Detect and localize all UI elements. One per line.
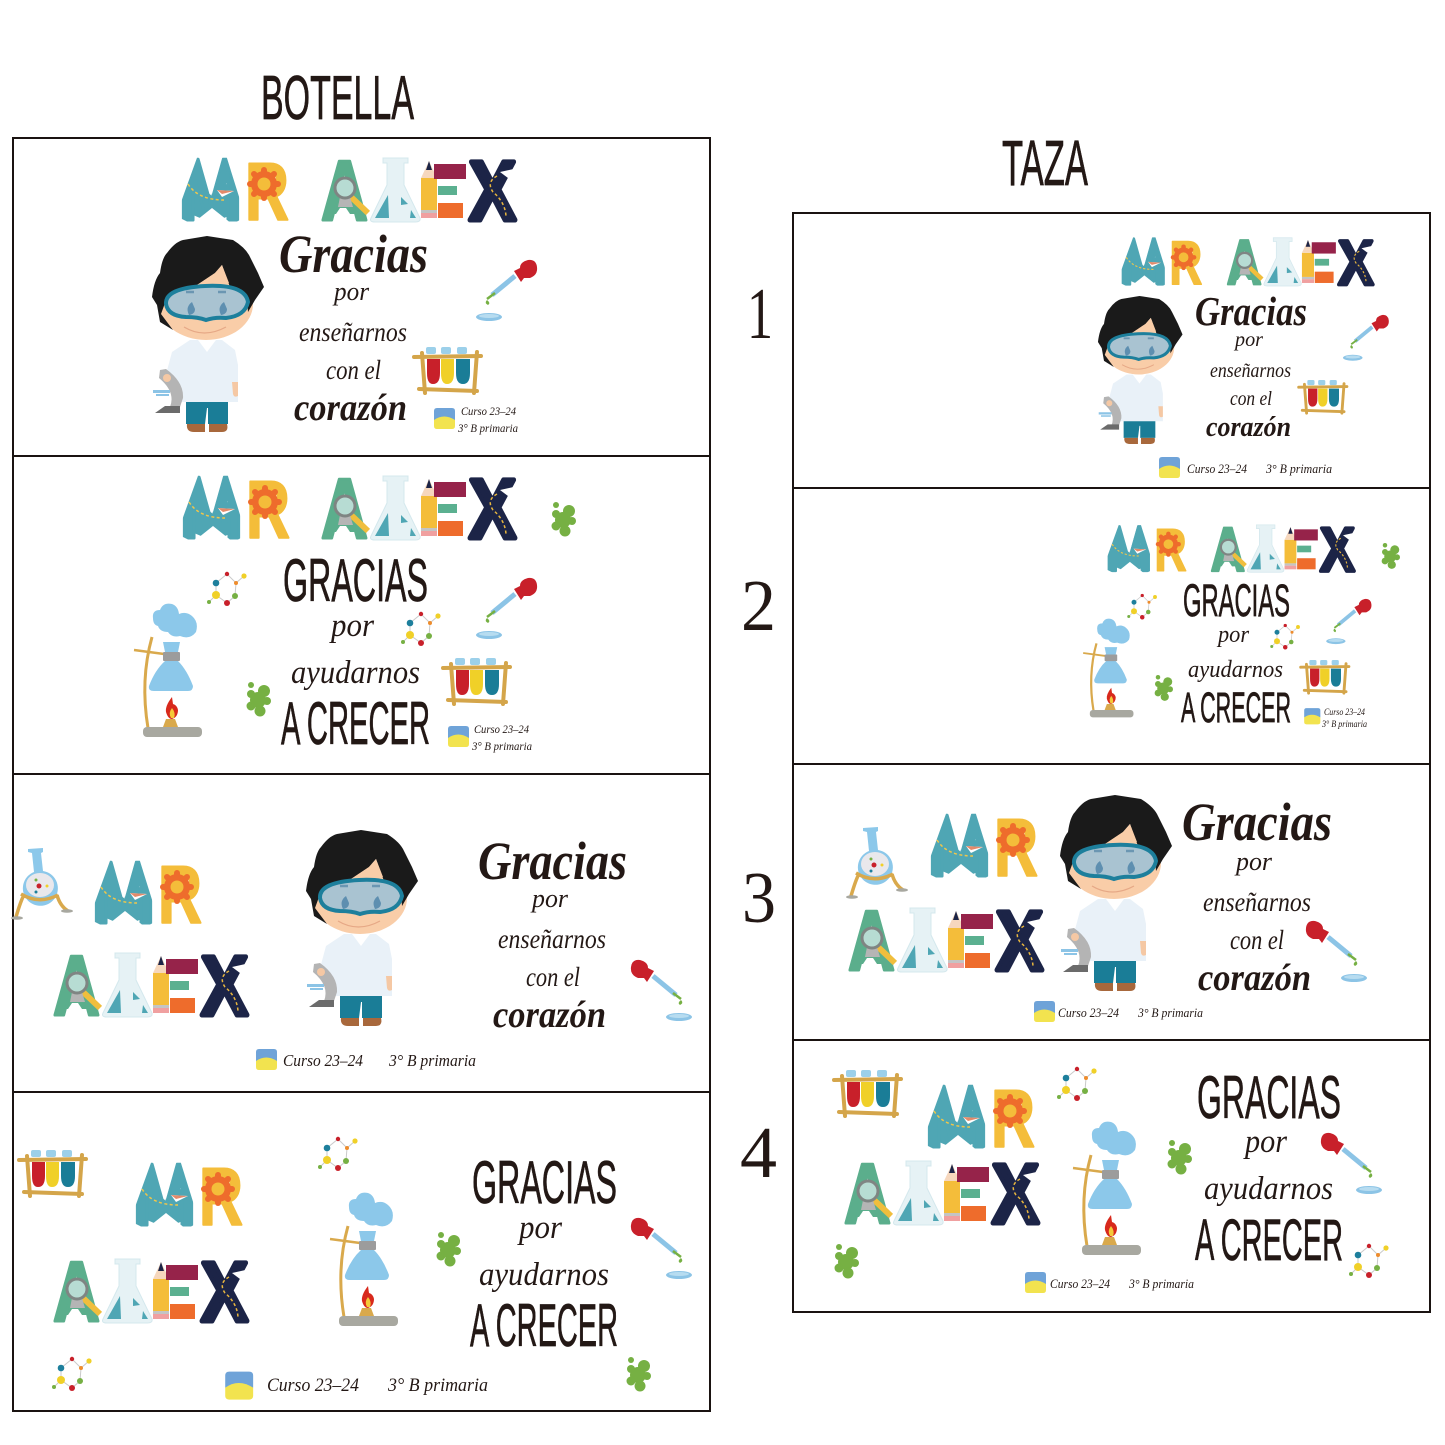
icon: class badge (448, 726, 469, 747)
course text: Curso 23–24 (1187, 461, 1247, 476)
icon: molecule (318, 1137, 358, 1171)
course text (1058, 1005, 1203, 1020)
heading: taza: TAZA (1002, 127, 1088, 199)
course text (1187, 461, 1332, 476)
course text (267, 1375, 488, 1396)
icon: class badge (1304, 708, 1320, 724)
logo: MR (171, 458, 290, 557)
course text: 3° B primaria (387, 1375, 488, 1396)
icon: dropper (631, 960, 692, 1021)
panel: botella 1 (13, 138, 710, 456)
icon: test tube rack (834, 1070, 901, 1116)
icon: round flask (11, 848, 73, 920)
icon: dropper (1321, 1133, 1382, 1194)
message text: corazón (493, 994, 606, 1036)
message text: Gracias (1182, 792, 1332, 852)
message text: enseñarnos (1203, 887, 1311, 917)
logo: ALEX (1227, 226, 1375, 298)
message text: por (1233, 329, 1263, 351)
course text (457, 404, 518, 435)
icon: splat (246, 682, 271, 716)
icon: burner flask (1073, 1122, 1141, 1255)
icon: dropper (1306, 921, 1367, 982)
icon: dropper (631, 1218, 692, 1279)
frame (793, 488, 1430, 764)
message text: con el (526, 962, 580, 992)
message text: con el (326, 355, 381, 385)
message text: corazón (1206, 411, 1291, 443)
message text: por (1216, 622, 1250, 648)
message text: Gracias (478, 831, 627, 891)
icon: dropper (1326, 599, 1371, 644)
message text: con el (1230, 925, 1284, 955)
frame (793, 213, 1430, 488)
course text: Curso 23–24 (474, 722, 529, 736)
icon: splat (552, 502, 576, 536)
icon: scientist (1060, 795, 1172, 991)
logo: MR (83, 843, 202, 942)
course text: 3° B primaria (1321, 719, 1367, 729)
icon: class badge (1025, 1272, 1046, 1293)
number 4: 4 (740, 1112, 777, 1193)
icon: scientist (152, 236, 264, 432)
message text (1181, 575, 1291, 732)
frame (793, 764, 1430, 1040)
course text (471, 722, 532, 753)
icon: class badge (434, 408, 455, 429)
course text: Curso 23–24 (1324, 707, 1365, 717)
message text: A CRECER (1181, 684, 1291, 732)
number 1: 1 (747, 273, 773, 354)
icon: molecule (1127, 594, 1157, 620)
message text: Gracias (1195, 288, 1307, 334)
frame (793, 1040, 1430, 1312)
panel: botella 2 (13, 456, 710, 774)
number 3: 3 (742, 857, 776, 938)
icon: burner flask (134, 604, 202, 737)
icon: molecule (207, 572, 247, 606)
message text: con el (1230, 388, 1272, 410)
course text: 3° B primaria (388, 1051, 476, 1070)
panel: botella 4 (13, 1092, 710, 1411)
logo: ALEX (321, 144, 518, 239)
message text (281, 547, 430, 757)
logo: MR (170, 140, 289, 239)
logo: ALEX (848, 894, 1045, 989)
logo: MR (124, 1145, 243, 1244)
frame (13, 138, 710, 456)
message text (470, 1149, 618, 1359)
message text: enseñarnos (498, 924, 606, 954)
logo: ALEX (844, 1147, 1041, 1242)
icon: burner flask (330, 1193, 398, 1326)
message text: por (329, 608, 374, 644)
course text: Curso 23–24 (461, 404, 516, 418)
course text (1050, 1276, 1194, 1291)
message text: enseñarnos (299, 317, 407, 347)
message text: ayudarnos (1204, 1171, 1333, 1207)
logo: ALEX (53, 939, 250, 1034)
message text: ayudarnos (1188, 657, 1283, 683)
icon: class badge (1034, 1001, 1055, 1022)
course text: 3° B primaria (1265, 461, 1332, 476)
icon: splat (1155, 675, 1173, 701)
message text: GRACIAS (1183, 575, 1290, 626)
icon: test tube rack (1301, 660, 1349, 693)
course text: Curso 23–24 (267, 1375, 359, 1396)
logo: MR (1099, 512, 1187, 585)
logo: ALEX (53, 1245, 250, 1340)
course text: Curso 23–24 (283, 1051, 363, 1070)
course text (283, 1051, 476, 1070)
icon: splat (834, 1244, 859, 1278)
number 2: 2 (741, 565, 776, 646)
icon: class badge (225, 1372, 253, 1400)
icon: dropper (476, 260, 537, 321)
course text (1321, 707, 1367, 729)
panel: botella 3 (11, 774, 710, 1092)
message text: por (1243, 1124, 1287, 1160)
icon: class badge (256, 1049, 277, 1070)
panel: botella 2: A CRECER (281, 690, 430, 757)
panel: taza 3 (793, 764, 1430, 1040)
course text: 3° B primaria (471, 739, 532, 753)
icon: round flask (846, 827, 908, 899)
logo: MR (916, 1067, 1035, 1166)
message text: ayudarnos (291, 655, 420, 691)
message text: por (332, 277, 370, 306)
message text: corazón (294, 387, 407, 429)
icon: molecule (52, 1357, 92, 1391)
icon: scientist (1098, 296, 1183, 444)
icon: test tube rack (443, 658, 510, 704)
icon: molecule (1349, 1244, 1389, 1278)
message text: enseñarnos (1210, 360, 1291, 382)
icon: splat (436, 1232, 461, 1266)
message text (1182, 792, 1332, 999)
icon: dropper (476, 578, 537, 639)
icon: splat (1168, 1140, 1192, 1174)
panel: taza 1 (793, 213, 1430, 488)
message text: por (530, 884, 569, 913)
heading: botella: BOTELLA (261, 64, 414, 133)
message text (478, 831, 627, 1036)
message text (1195, 288, 1307, 443)
message text: ayudarnos (479, 1257, 609, 1293)
logo: ALEX (1211, 515, 1356, 585)
icon: test tube rack (19, 1150, 86, 1196)
message text: por (1234, 847, 1273, 876)
message text (279, 224, 428, 429)
course text: Curso 23–24 (1050, 1276, 1110, 1291)
frame (13, 774, 710, 1092)
course text: 3° B primaria (457, 421, 518, 435)
icon: molecule (1057, 1067, 1097, 1101)
course text: 3° B primaria (1137, 1005, 1203, 1020)
logo: MR (919, 796, 1038, 895)
message text: corazón (1198, 957, 1311, 999)
icon: splat (626, 1357, 651, 1392)
panel: taza 2 (793, 488, 1430, 764)
logo: MR (1113, 225, 1202, 299)
icon: burner flask (1083, 619, 1133, 717)
panel: taza 4 (793, 1040, 1430, 1312)
icon: molecule (401, 612, 441, 646)
icon: dropper (1343, 315, 1389, 361)
panel: botella 4: A CRECER (470, 1292, 618, 1359)
message text: por (517, 1210, 562, 1246)
logo: ALEX (321, 462, 518, 557)
frame (13, 456, 710, 774)
message text: Gracias (279, 224, 428, 284)
frame (13, 1092, 710, 1411)
icon: splat (1382, 543, 1400, 569)
course text: Curso 23–24 (1058, 1005, 1119, 1020)
message text (1195, 1064, 1343, 1273)
icon: test tube rack (414, 347, 481, 393)
course text: 3° B primaria (1128, 1276, 1194, 1291)
icon: molecule (1270, 624, 1300, 650)
message text: GRACIAS (472, 1149, 617, 1216)
message text: GRACIAS (283, 547, 428, 614)
icon: scientist (306, 830, 418, 1026)
icon: class badge (1159, 457, 1180, 478)
icon: test tube rack (1299, 380, 1347, 413)
